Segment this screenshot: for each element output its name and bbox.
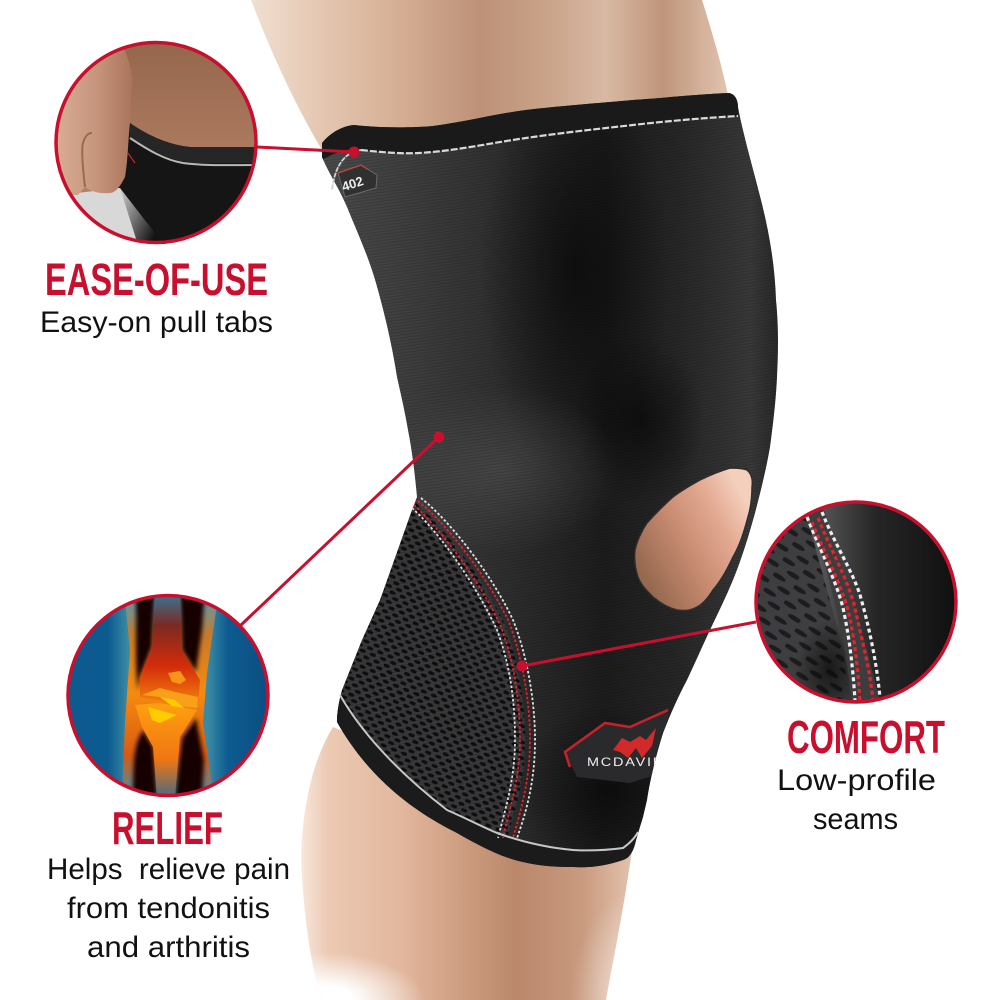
tibia: [135, 703, 197, 797]
lower leg: [295, 720, 640, 1000]
callout text: comfort description: Low-profile: [777, 764, 936, 797]
tab stitching: [332, 150, 361, 190]
brand logo: MCDAVID: [587, 755, 665, 769]
size badge: 402: [340, 173, 365, 194]
callout text: relief description: and arthritis: [87, 931, 250, 964]
dark areas: [132, 590, 205, 797]
callout text: relief description: Helps relieve pain: [47, 853, 290, 886]
callout text: relief description: from tendonitis: [67, 892, 270, 925]
callout image: pull tab: [50, 40, 260, 250]
soft tissue: [122, 590, 219, 797]
sleeve body: [322, 93, 778, 868]
side seam: [412, 498, 535, 838]
connector: comfort: [516, 622, 756, 672]
callout text: comfort description: seams: [813, 803, 898, 836]
connector: ease of use: [257, 146, 360, 158]
callout text: relief description: [47, 853, 290, 964]
top stitching: [361, 116, 738, 153]
connector: relief: [241, 432, 444, 625]
callout text: pull tabs: Easy-on pull tabs: [40, 306, 273, 339]
callout text: comfort description: [777, 764, 936, 836]
mesh panel: [337, 503, 525, 838]
callout heading: ease-of-use: EASE-OF-USE: [45, 254, 268, 305]
upper leg: [251, 0, 728, 149]
cartilage highlight: [148, 697, 184, 723]
knee opening: [635, 468, 752, 611]
bottom stitching: [340, 695, 638, 850]
callout image: knee x-ray: [68, 590, 268, 797]
callout heading: relief: RELIEF: [112, 802, 223, 854]
bottom band: [336, 697, 638, 868]
knee sleeve: [322, 93, 778, 868]
brand logo: [565, 710, 670, 783]
callout image: seam close-up: [754, 500, 958, 704]
top band: [322, 93, 738, 160]
patella: [168, 671, 186, 684]
femur: [140, 590, 200, 707]
size badge: [338, 165, 377, 197]
